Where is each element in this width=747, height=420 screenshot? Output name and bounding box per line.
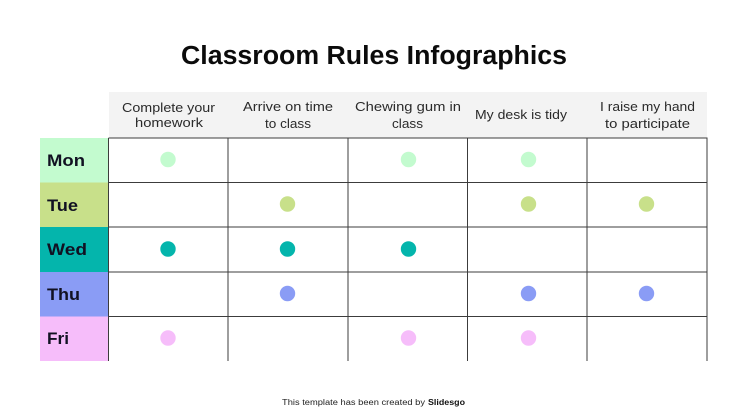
header: my desk is tidy: My desk is tidy [475,107,568,122]
header: raise my hand: I raise my hand [600,99,695,114]
day: Thu [40,272,108,316]
dots: Tue [280,196,654,212]
day: Mon [40,138,108,182]
title: Classroom Rules Infographics [181,42,567,70]
dots: Wed [160,241,416,257]
footer credit: Slidesgo [428,398,465,407]
dots: Thu [280,286,654,301]
footer credit [282,398,465,407]
dots: Mon [160,152,536,167]
day: Fri: Fri [47,329,69,348]
dots: Fri [160,330,536,346]
header: chewing gum: Chewing gum in [355,99,461,114]
header: complete your homework: Complete your [122,100,216,115]
day: Tue: Tue [47,196,78,215]
header: complete your homework [122,100,216,130]
table grid [108,138,708,361]
day: Tue [40,182,108,227]
header: arrive on time: Arrive on time [243,99,333,114]
header: chewing gum: class [392,116,424,131]
day: Thu: Thu [47,285,80,304]
footer credit: This template has been created by [282,398,425,407]
header: arrive on time [243,99,333,131]
day: Mon: Mon [47,151,85,170]
day: Fri [40,316,108,361]
header: arrive on time: to class [265,116,312,131]
day labels [40,138,108,361]
header: chewing gum [355,99,461,131]
header row [109,92,707,138]
header: raise my hand: to participate [605,116,690,131]
header: raise my hand [600,99,695,131]
header: complete your homework: homework [135,115,204,130]
day: Wed [40,227,108,272]
day: Wed: Wed [47,240,87,259]
